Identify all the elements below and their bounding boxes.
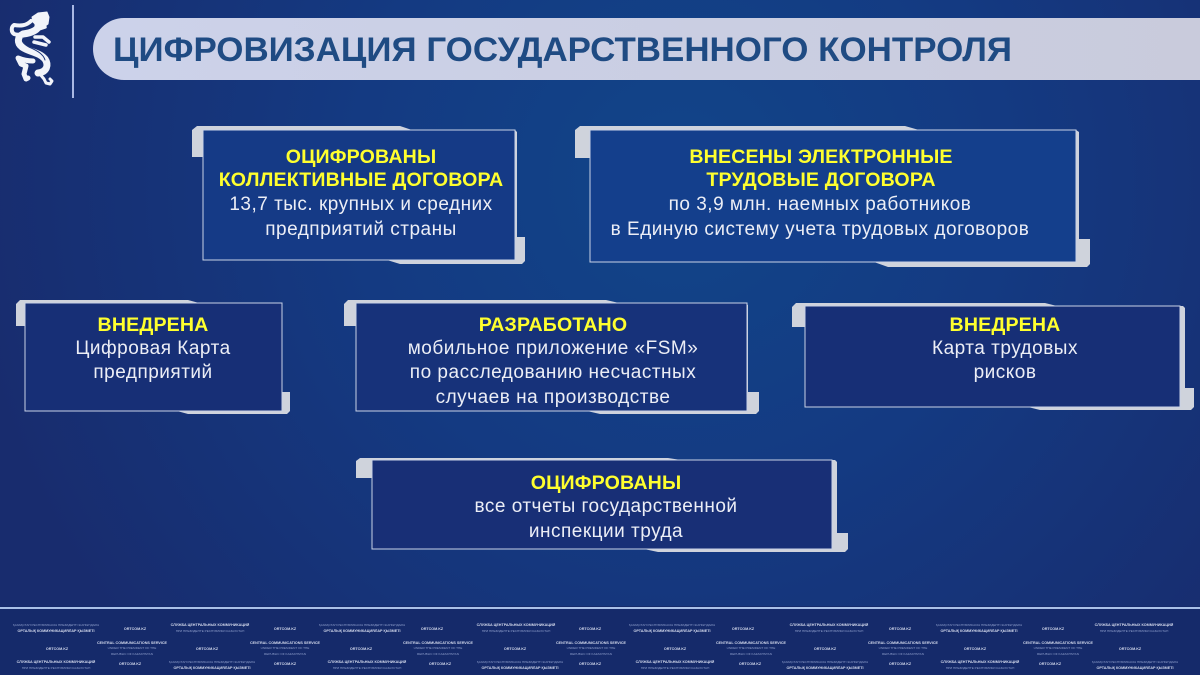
- footer watermark row 1: СЛУЖБА ЦЕНТРАЛЬНЫХ КОММУНИКАЦИЙ: [171, 623, 250, 627]
- title: ЦИФРОВИЗАЦИЯ ГОСУДАРСТВЕННОГО КОНТРОЛЯ: [113, 31, 1012, 69]
- card body: [805, 306, 1180, 407]
- footer watermark row 3: ҚАЗАҚСТАН РЕСПУБЛИКАСЫ ПРЕЗИДЕНТІ ЖАНЫНДАҒЫ: [477, 660, 563, 664]
- card text: случаев на производстве: [436, 387, 670, 408]
- footer watermark row 3: ORTCOM.KZ: [274, 662, 297, 666]
- footer watermark row 3: СЛУЖБА ЦЕНТРАЛЬНЫХ КОММУНИКАЦИЙ: [328, 660, 407, 664]
- footer watermark row 2: ORTCOM.KZ: [196, 647, 219, 651]
- footer watermark row 2: CENTRAL COMMUNICATIONS SERVICE: [556, 641, 627, 645]
- footer watermark row 1: ORTCOM.KZ: [1042, 627, 1065, 631]
- card text: по расследованию несчастных: [410, 362, 696, 383]
- footer watermark row 3: [17, 660, 1178, 670]
- footer watermark row 2: UNDER THE PRESIDENT OF THE: [414, 646, 462, 650]
- card text: [611, 146, 1029, 240]
- footer watermark row 1: ПРИ ПРЕЗИДЕНТЕ РЕСПУБЛИКИ КАЗАХСТАН: [1100, 629, 1168, 633]
- footer watermark row 1: ORTCOM.KZ: [732, 627, 755, 631]
- footer watermark row 2: REPUBLIC OF KAZAKHSTAN: [882, 652, 924, 656]
- footer watermark row 3: СЛУЖБА ЦЕНТРАЛЬНЫХ КОММУНИКАЦИЙ: [17, 660, 96, 664]
- footer watermark row 3: ОРТАЛЫҚ КОММУНИКАЦИЯЛАР ҚЫЗМЕТІ: [482, 666, 558, 670]
- card text: 13,7 тыс. крупных и средних: [229, 194, 493, 215]
- footer watermark row 1: ORTCOM.KZ: [421, 627, 444, 631]
- panel: FSM mobile app: [344, 300, 759, 414]
- card body: [372, 460, 832, 549]
- footer watermark row 2: CENTRAL COMMUNICATIONS SERVICE: [1023, 641, 1094, 645]
- panel: collective agreements: [192, 126, 525, 264]
- footer watermark row 1: ORTCOM.KZ: [579, 627, 602, 631]
- footer watermark row 3: ҚАЗАҚСТАН РЕСПУБЛИКАСЫ ПРЕЗИДЕНТІ ЖАНЫНДАҒЫ: [782, 660, 868, 664]
- footer watermark row 3: ORTCOM.KZ: [739, 662, 762, 666]
- card text: предприятий: [93, 362, 213, 383]
- footer watermark row 2: UNDER THE PRESIDENT OF THE: [879, 646, 927, 650]
- footer watermark row 1: СЛУЖБА ЦЕНТРАЛЬНЫХ КОММУНИКАЦИЙ: [477, 623, 556, 627]
- footer watermark row 2: [46, 641, 1142, 656]
- card frame: [344, 300, 759, 414]
- card body: [590, 130, 1076, 262]
- footer watermark row 1: СЛУЖБА ЦЕНТРАЛЬНЫХ КОММУНИКАЦИЙ: [790, 623, 869, 627]
- card text: Карта трудовых: [932, 338, 1078, 359]
- footer watermark row 1: [13, 623, 1174, 633]
- footer background: [0, 606, 1200, 675]
- footer watermark row 3: ПРИ ПРЕЗИДЕНТЕ РЕСПУБЛИКИ КАЗАХСТАН: [22, 666, 90, 670]
- footer watermark row 3: ПРИ ПРЕЗИДЕНТЕ РЕСПУБЛИКИ КАЗАХСТАН: [333, 666, 401, 670]
- card text: РАЗРАБОТАНО: [479, 314, 627, 336]
- logo: snow leopard emblem: [12, 12, 52, 84]
- card text: рисков: [974, 362, 1036, 383]
- footer watermark row 3: ОРТАЛЫҚ КОММУНИКАЦИЯЛАР ҚЫЗМЕТІ: [1097, 666, 1173, 670]
- card text: ОЦИФРОВАНЫ: [531, 472, 681, 494]
- footer watermark row 2: REPUBLIC OF KAZAKHSTAN: [570, 652, 612, 656]
- card text: [474, 472, 738, 542]
- card text: КОЛЛЕКТИВНЫЕ ДОГОВОРА: [219, 169, 503, 191]
- footer watermark row 2: UNDER THE PRESIDENT OF THE: [261, 646, 309, 650]
- footer watermark row 1: ҚАЗАҚСТАН РЕСПУБЛИКАСЫ ПРЕЗИДЕНТІ ЖАНЫНДАҒЫ: [319, 623, 405, 627]
- footer watermark row 1: ОРТАЛЫҚ КОММУНИКАЦИЯЛАР ҚЫЗМЕТІ: [941, 629, 1017, 633]
- footer watermark row 2: ORTCOM.KZ: [964, 647, 987, 651]
- card body: [25, 303, 282, 411]
- card text: [219, 146, 503, 240]
- footer watermark row 3: ORTCOM.KZ: [119, 662, 142, 666]
- footer watermark row 2: ORTCOM.KZ: [1119, 647, 1142, 651]
- footer watermark row 2: REPUBLIC OF KAZAKHSTAN: [111, 652, 153, 656]
- card text: ТРУДОВЫЕ ДОГОВОРА: [706, 169, 936, 191]
- footer watermark row 2: CENTRAL COMMUNICATIONS SERVICE: [250, 641, 321, 645]
- card text: ВНЕСЕНЫ ЭЛЕКТРОННЫЕ: [689, 146, 953, 168]
- footer watermark row 1: ORTCOM.KZ: [889, 627, 912, 631]
- card text: [408, 314, 698, 408]
- footer watermark row 3: ORTCOM.KZ: [579, 662, 602, 666]
- card frame: [575, 126, 1090, 267]
- footer watermark row 2: ORTCOM.KZ: [814, 647, 837, 651]
- panel: electronic labor contracts: [575, 126, 1090, 267]
- footer watermark row 2: CENTRAL COMMUNICATIONS SERVICE: [403, 641, 474, 645]
- footer watermark row 2: UNDER THE PRESIDENT OF THE: [108, 646, 156, 650]
- card text: инспекции труда: [529, 521, 683, 542]
- footer watermark row 1: СЛУЖБА ЦЕНТРАЛЬНЫХ КОММУНИКАЦИЙ: [1095, 623, 1174, 627]
- panel: digital map of enterprises: [16, 300, 290, 414]
- footer watermark row 3: ПРИ ПРЕЗИДЕНТЕ РЕСПУБЛИКИ КАЗАХСТАН: [641, 666, 709, 670]
- footer watermark row 3: ҚАЗАҚСТАН РЕСПУБЛИКАСЫ ПРЕЗИДЕНТІ ЖАНЫНДАҒЫ: [1092, 660, 1178, 664]
- footer watermark row 3: ҚАЗАҚСТАН РЕСПУБЛИКАСЫ ПРЕЗИДЕНТІ ЖАНЫНДАҒЫ: [169, 660, 255, 664]
- footer watermark row 2: UNDER THE PRESIDENT OF THE: [567, 646, 615, 650]
- footer watermark row 2: ORTCOM.KZ: [504, 647, 527, 651]
- footer watermark row 2: ORTCOM.KZ: [350, 647, 373, 651]
- footer watermark row 1: ҚАЗАҚСТАН РЕСПУБЛИКАСЫ ПРЕЗИДЕНТІ ЖАНЫНДАҒЫ: [629, 623, 715, 627]
- footer watermark row 3: ПРИ ПРЕЗИДЕНТЕ РЕСПУБЛИКИ КАЗАХСТАН: [946, 666, 1014, 670]
- title banner: [93, 18, 1200, 80]
- footer watermark row 2: REPUBLIC OF KAZAKHSTAN: [417, 652, 459, 656]
- footer watermark row 1: ПРИ ПРЕЗИДЕНТЕ РЕСПУБЛИКИ КАЗАХСТАН: [795, 629, 863, 633]
- footer band: [0, 606, 1200, 675]
- footer watermark row 1: ҚАЗАҚСТАН РЕСПУБЛИКАСЫ ПРЕЗИДЕНТІ ЖАНЫНДАҒЫ: [936, 623, 1022, 627]
- footer watermark row 1: ОРТАЛЫҚ КОММУНИКАЦИЯЛАР ҚЫЗМЕТІ: [634, 629, 710, 633]
- card text: ВНЕДРЕНА: [950, 314, 1060, 336]
- footer watermark row 3: СЛУЖБА ЦЕНТРАЛЬНЫХ КОММУНИКАЦИЙ: [636, 660, 715, 664]
- footer watermark row 2: UNDER THE PRESIDENT OF THE: [727, 646, 775, 650]
- card text: мобильное приложение «FSM»: [408, 338, 698, 359]
- card text: в Единую систему учета трудовых договоров: [611, 219, 1029, 240]
- footer watermark row 2: REPUBLIC OF KAZAKHSTAN: [264, 652, 306, 656]
- card text: все отчеты государственной: [474, 496, 738, 517]
- banner pill: [93, 18, 1200, 80]
- footer watermark row 2: UNDER THE PRESIDENT OF THE: [1034, 646, 1082, 650]
- footer watermark row 1: ПРИ ПРЕЗИДЕНТЕ РЕСПУБЛИКИ КАЗАХСТАН: [482, 629, 550, 633]
- footer watermark row 2: REPUBLIC OF KAZAKHSTAN: [1037, 652, 1079, 656]
- footer watermark row 2: ORTCOM.KZ: [46, 647, 69, 651]
- card text: [75, 314, 231, 383]
- card text: Цифровая Карта: [75, 338, 231, 359]
- footer watermark row 1: ORTCOM.KZ: [124, 627, 147, 631]
- footer watermark row 3: ОРТАЛЫҚ КОММУНИКАЦИЯЛАР ҚЫЗМЕТІ: [174, 666, 250, 670]
- footer watermark row 1: ORTCOM.KZ: [274, 627, 297, 631]
- card frame: [792, 303, 1194, 410]
- card text: ВНЕДРЕНА: [98, 314, 208, 336]
- footer watermark row 1: ПРИ ПРЕЗИДЕНТЕ РЕСПУБЛИКИ КАЗАХСТАН: [176, 629, 244, 633]
- footer watermark row 1: ОРТАЛЫҚ КОММУНИКАЦИЯЛАР ҚЫЗМЕТІ: [324, 629, 400, 633]
- footer watermark row 2: CENTRAL COMMUNICATIONS SERVICE: [97, 641, 168, 645]
- footer watermark row 3: ORTCOM.KZ: [889, 662, 912, 666]
- footer watermark row 3: ORTCOM.KZ: [1039, 662, 1062, 666]
- footer watermark row 1: ОРТАЛЫҚ КОММУНИКАЦИЯЛАР ҚЫЗМЕТІ: [18, 629, 94, 633]
- panel: labor inspection reports: [356, 458, 848, 552]
- footer watermark row 1: ҚАЗАҚСТАН РЕСПУБЛИКАСЫ ПРЕЗИДЕНТІ ЖАНЫНДАҒЫ: [13, 623, 99, 627]
- footer watermark row 2: REPUBLIC OF KAZAKHSTAN: [730, 652, 772, 656]
- card frame: [192, 126, 525, 264]
- card frame: [356, 458, 848, 552]
- card text: [932, 314, 1078, 383]
- footer watermark row 3: ORTCOM.KZ: [429, 662, 452, 666]
- card text: предприятий страны: [265, 219, 457, 240]
- footer watermark row 2: ORTCOM.KZ: [664, 647, 687, 651]
- card frame: [16, 300, 290, 414]
- footer watermark row 2: CENTRAL COMMUNICATIONS SERVICE: [868, 641, 939, 645]
- card text: ОЦИФРОВАНЫ: [286, 146, 436, 168]
- card text: по 3,9 млн. наемных работников: [669, 194, 971, 215]
- footer watermark row 2: CENTRAL COMMUNICATIONS SERVICE: [716, 641, 787, 645]
- card body: [203, 130, 515, 260]
- footer rule: [0, 607, 1200, 609]
- footer watermark row 3: ОРТАЛЫҚ КОММУНИКАЦИЯЛАР ҚЫЗМЕТІ: [787, 666, 863, 670]
- footer watermark row 3: СЛУЖБА ЦЕНТРАЛЬНЫХ КОММУНИКАЦИЙ: [941, 660, 1020, 664]
- panel: labor risk map: [792, 303, 1194, 410]
- card body: [356, 303, 747, 411]
- logo divider: [72, 5, 74, 98]
